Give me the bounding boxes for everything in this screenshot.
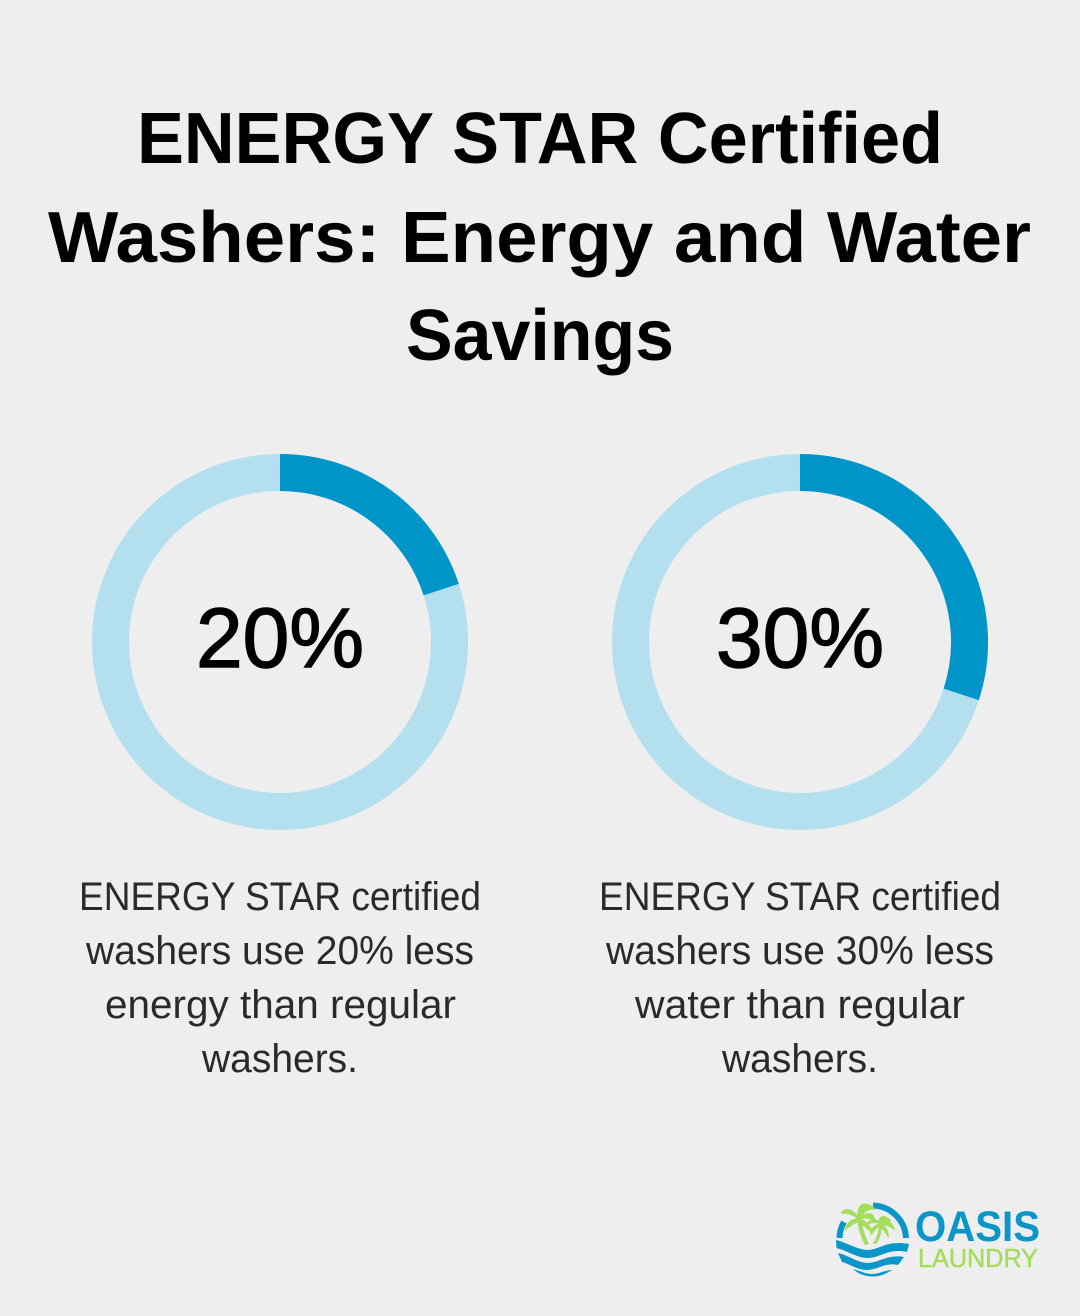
description: water: washers use 30% less (605, 929, 994, 973)
description: energy: energy than regular (105, 983, 456, 1027)
logo: Oasis Laundry (836, 1203, 1040, 1276)
panel: water savings (599, 472, 1001, 1081)
value: 30%: 30% (716, 591, 884, 685)
wordmark: LAUNDRY: LAUNDRY (918, 1243, 1038, 1273)
panel: energy savings (79, 472, 481, 1081)
title: Savings (406, 296, 674, 376)
description: energy: washers use 20% less (85, 929, 474, 973)
description: water: ENERGY STAR certified (599, 875, 1001, 919)
value: 20%: 20% (196, 591, 364, 685)
description: water: water than regular (634, 983, 965, 1027)
title (48, 99, 1031, 376)
title: Washers: Energy and Water (48, 198, 1031, 278)
description: energy (79, 875, 481, 1081)
donut chart: 30% (630, 472, 970, 812)
icon: palm trees and waves (836, 1204, 909, 1276)
title: ENERGY STAR Certified (137, 99, 943, 179)
description: water (599, 875, 1001, 1081)
description: energy: ENERGY STAR certified (79, 875, 481, 919)
description: water: washers. (721, 1037, 878, 1081)
description: energy: washers. (201, 1037, 358, 1081)
donut chart: 20% (110, 472, 450, 812)
wordmark: OASIS: OASIS (915, 1203, 1040, 1251)
